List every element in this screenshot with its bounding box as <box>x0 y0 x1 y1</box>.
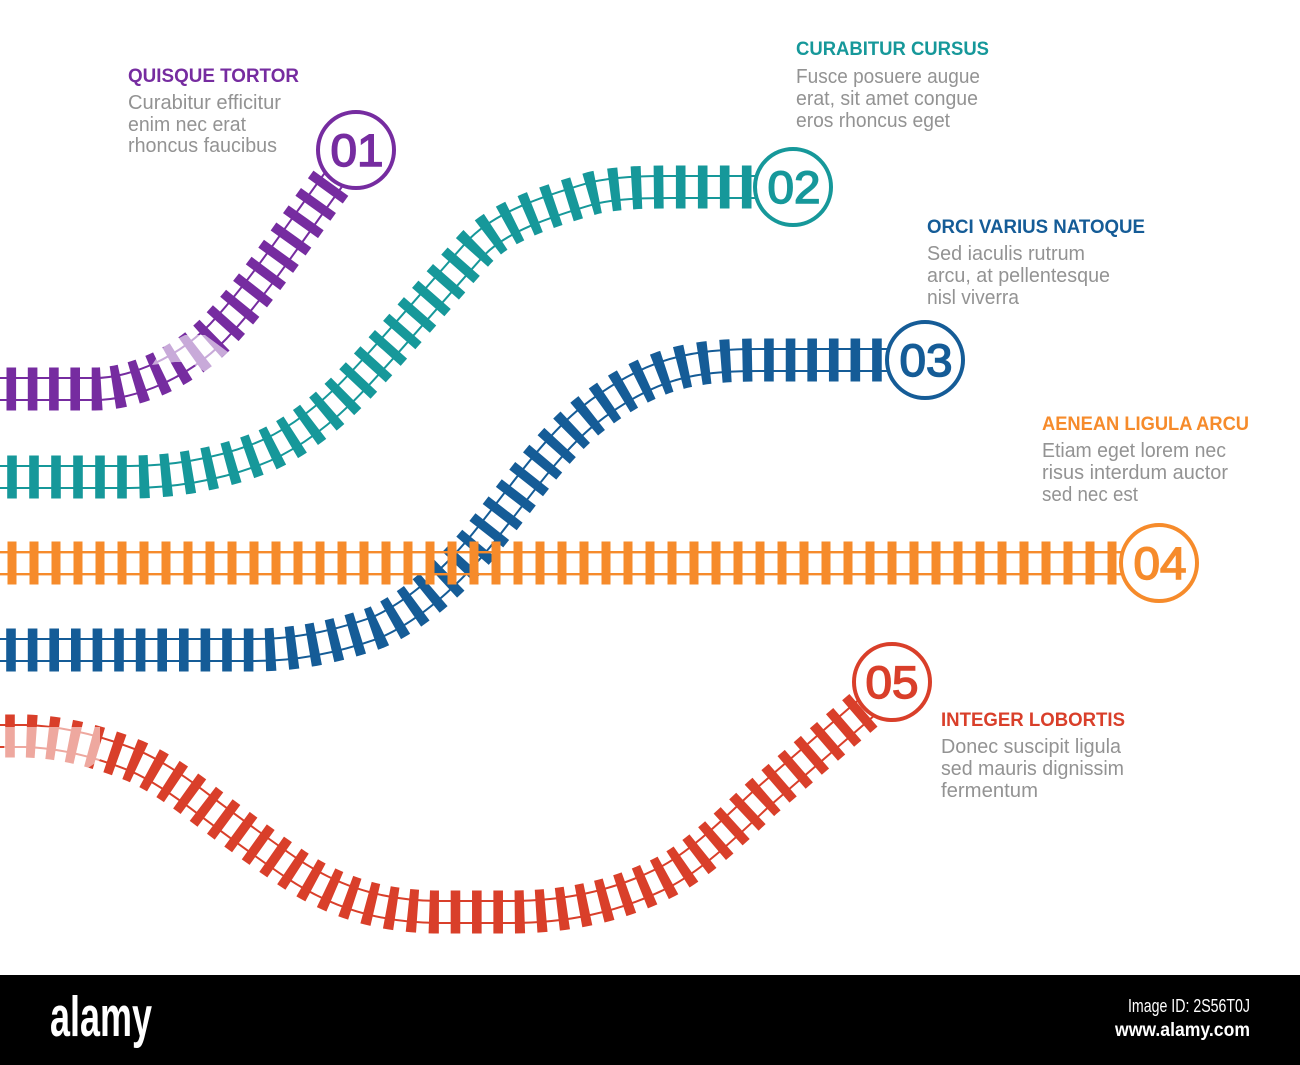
track 02: teal railway <box>0 187 760 477</box>
text block 04: risus interdum auctor <box>1042 462 1228 484</box>
track 04: orange railway <box>0 551 1125 575</box>
text block 05: sed mauris dignissim <box>941 758 1124 780</box>
footer bar: alamy <box>50 985 152 1049</box>
badge 04: 04 <box>1134 538 1186 589</box>
text block 03: Sed iaculis rutrum <box>927 243 1085 265</box>
text block 01: QUISQUE TORTOR <box>128 66 299 87</box>
text block 04 <box>1042 414 1249 506</box>
text block 04: Etiam eget lorem nec <box>1042 440 1226 462</box>
text block 05: Donec suscipit ligula <box>941 736 1122 758</box>
badge 05 <box>854 644 930 720</box>
text block 05: fermentum <box>941 780 1038 802</box>
text block 02: erat, sit amet congue <box>796 88 978 110</box>
footer bar <box>0 975 1300 1065</box>
badge 01: 01 <box>330 125 384 176</box>
text block 02: CURABITUR CURSUS <box>796 39 989 60</box>
text block 01: enim nec erat <box>128 114 246 136</box>
text block 02: eros rhoncus eget <box>796 110 950 132</box>
track 05: red railway <box>0 696 880 912</box>
badge 03: 03 <box>900 335 952 386</box>
track 01: purple railway <box>0 168 342 389</box>
text block 05 <box>941 710 1125 802</box>
text block 03: arcu, at pellentesque <box>927 265 1110 287</box>
text block 01: rhoncus faucibus <box>128 135 277 157</box>
badge 02: 02 <box>768 162 820 213</box>
text block 04: AENEAN LIGULA ARCU <box>1042 414 1249 435</box>
badge 03 <box>887 322 963 398</box>
text block 03: nisl viverra <box>927 287 1020 309</box>
text block 02 <box>796 39 989 132</box>
text block 03: ORCI VARIUS NATOQUE <box>927 217 1145 238</box>
text block 03 <box>927 217 1145 309</box>
badge 04 <box>1121 525 1197 601</box>
text block 05: INTEGER LOBORTIS <box>941 710 1125 731</box>
footer bar: Image ID: 2S56T0J <box>1128 996 1250 1016</box>
badge 01 <box>318 112 394 188</box>
badge 05: 05 <box>866 657 918 708</box>
text block 02: Fusce posuere augue <box>796 66 980 88</box>
text block 04: sed nec est <box>1042 484 1138 506</box>
text block 01: Curabitur efficitur <box>128 92 281 114</box>
badge 02 <box>755 149 831 225</box>
text block 01 <box>128 66 299 157</box>
footer bar: www.alamy.com <box>1114 1020 1250 1041</box>
track 03: blue railway <box>0 360 890 650</box>
